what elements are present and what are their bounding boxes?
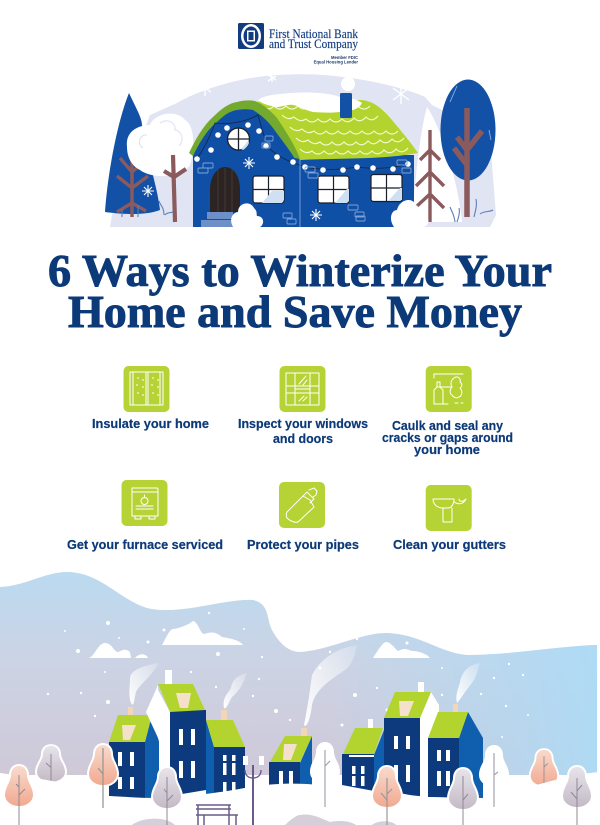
blue gable	[193, 109, 295, 159]
house wall	[193, 155, 414, 227]
chimneys	[128, 670, 458, 748]
tip: caulk and seal	[382, 366, 513, 457]
label: Inspect your windows	[238, 417, 368, 431]
sky	[0, 572, 597, 775]
lime roof	[240, 100, 418, 160]
wall snowflakes	[243, 157, 322, 221]
label: Caulk and seal any	[392, 419, 503, 433]
icon: caulk can and sponge	[426, 366, 472, 412]
logo FDIC note: Member FDIC	[331, 55, 358, 60]
white tree trunk	[164, 155, 186, 222]
logo mark	[238, 23, 264, 49]
label: Clean your gutters	[393, 538, 506, 552]
chimney	[340, 77, 355, 118]
green roof arch	[189, 100, 300, 159]
white bush right	[391, 200, 428, 227]
tip: insulate your home	[92, 366, 209, 431]
door steps	[201, 212, 236, 227]
logo FDIC note: Equal Housing Lender	[314, 60, 358, 64]
door	[210, 167, 240, 212]
round window	[228, 128, 250, 150]
winter village illustration	[0, 572, 600, 825]
tip: gutters	[393, 485, 506, 552]
white bush left	[231, 203, 263, 227]
string lights	[194, 115, 411, 173]
snow dots	[47, 612, 529, 738]
label: Protect your pipes	[247, 538, 359, 552]
clouds	[89, 621, 430, 658]
foreground trees	[4, 742, 592, 825]
oval tree trunk	[454, 108, 482, 217]
icon: gutter	[426, 485, 472, 531]
bench	[196, 805, 238, 825]
tall white tree on right	[412, 107, 462, 222]
building 2	[146, 684, 206, 796]
winter house illustration	[105, 72, 496, 227]
roof scallops	[262, 106, 408, 154]
icon: pipe	[279, 482, 325, 528]
logo name: and Trust Company	[269, 37, 359, 51]
title: 6 Ways to Winterize Your	[48, 245, 552, 296]
building 3	[206, 720, 245, 795]
left blue pine tree	[105, 93, 160, 214]
snowflakes on background	[198, 72, 409, 104]
title	[48, 245, 552, 337]
building 6	[384, 692, 439, 797]
white snowy tree	[127, 114, 193, 176]
background trees	[36, 745, 558, 787]
window middle	[318, 176, 349, 203]
title: Home and Save Money	[68, 286, 522, 337]
label: Get your furnace serviced	[67, 538, 223, 552]
label: and doors	[273, 432, 333, 446]
icon: furnace	[122, 480, 168, 526]
snowy ground	[0, 772, 600, 825]
lavender background band	[110, 74, 496, 227]
tip: inspect windows and doors	[238, 366, 368, 446]
left pine trunk	[117, 150, 148, 217]
foreground mounds	[132, 815, 396, 825]
snow on roof	[258, 92, 362, 113]
label: your home	[414, 443, 480, 457]
logo: First National Bank and Trust Company	[238, 23, 359, 64]
logo name: First National Bank	[269, 27, 359, 41]
building 4	[269, 736, 312, 785]
icon: window	[280, 366, 326, 412]
building 5	[342, 728, 384, 791]
small flake on blue tree	[142, 185, 154, 197]
wall details	[198, 136, 411, 227]
small plants	[122, 199, 493, 222]
tip: furnace	[67, 480, 223, 552]
label: Insulate your home	[92, 417, 209, 431]
building 1	[109, 715, 159, 798]
smoke plumes	[129, 645, 480, 726]
icon: insulation	[124, 366, 170, 412]
oval blue tree	[440, 80, 496, 180]
lamp post	[243, 756, 264, 825]
label: cracks or gaps around	[382, 431, 513, 445]
window right	[371, 174, 402, 202]
tip: pipes	[247, 482, 359, 552]
window left	[253, 176, 284, 203]
building 7	[428, 712, 483, 798]
right brown pine	[416, 130, 444, 222]
